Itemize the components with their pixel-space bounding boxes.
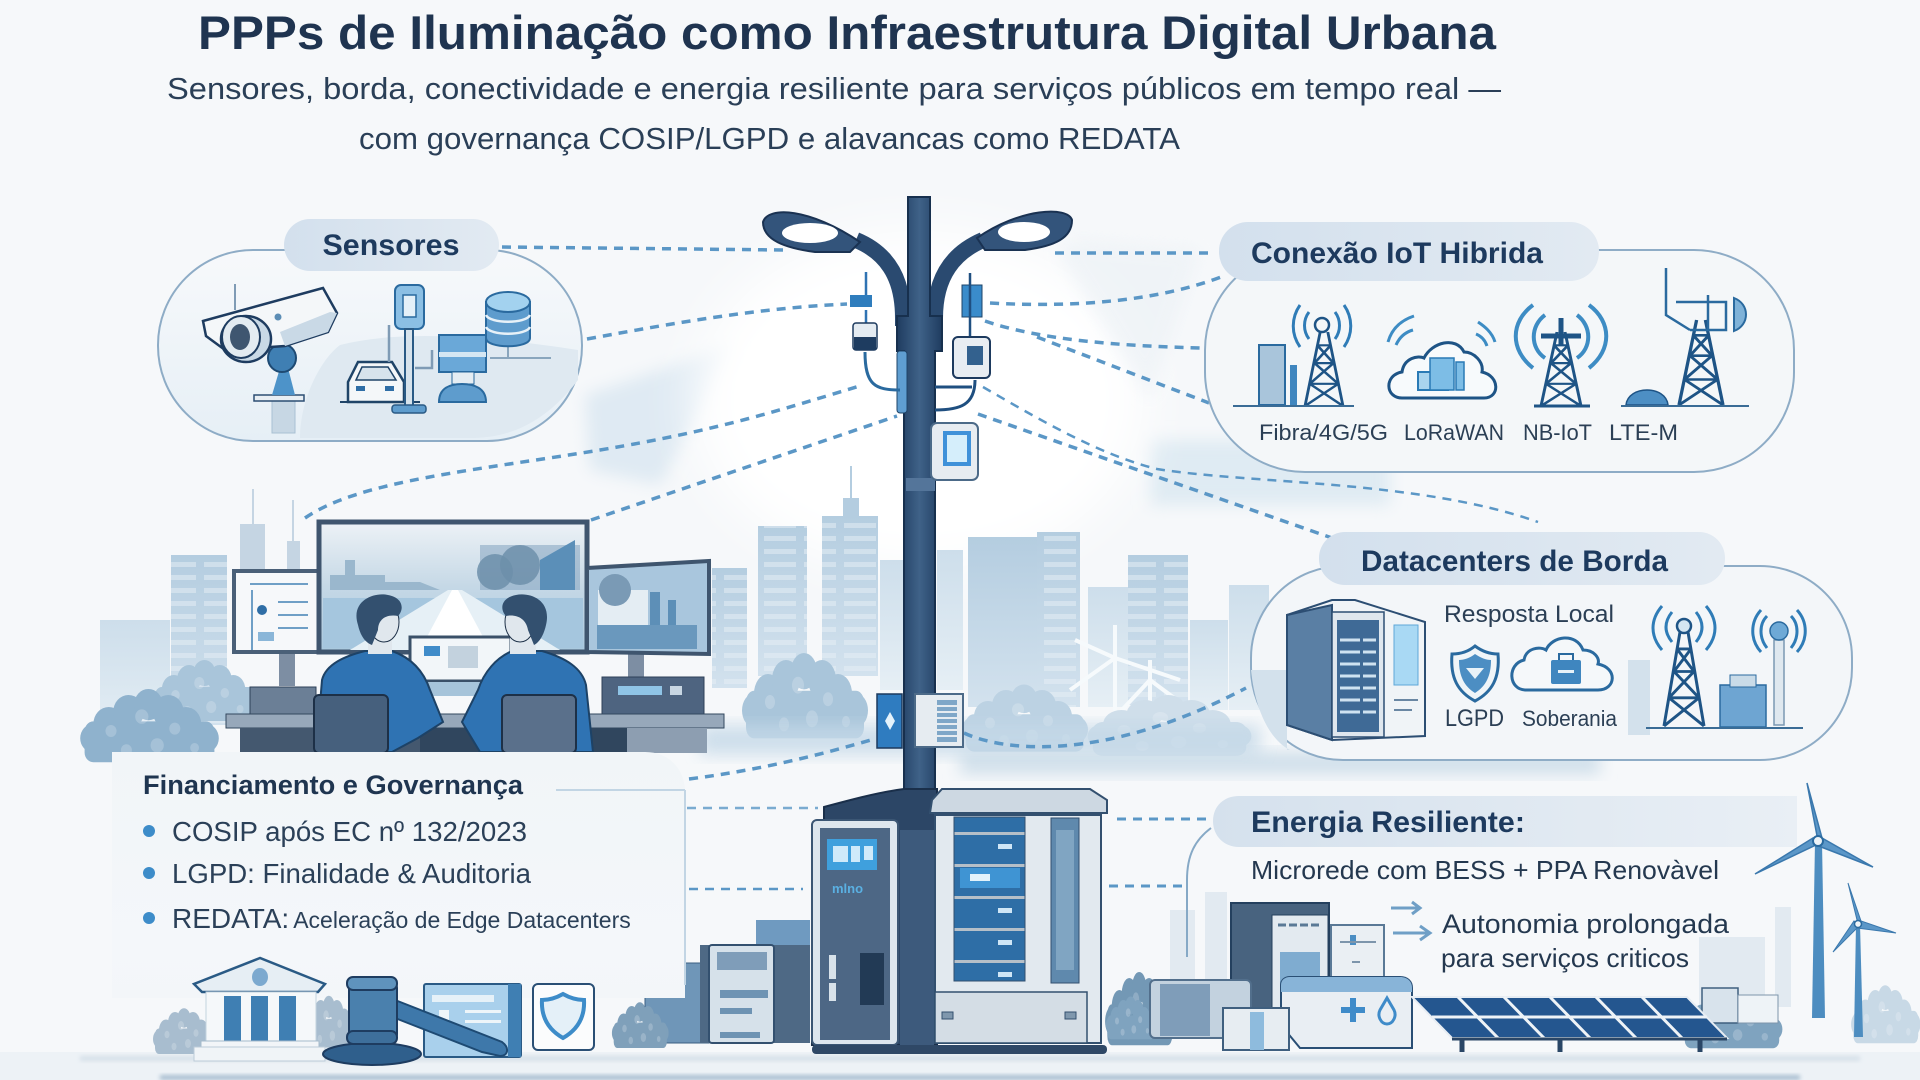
icon: soberania cloud	[1512, 638, 1612, 690]
blue pole box	[877, 694, 902, 748]
finance heading: Financiamento e Governança	[143, 770, 524, 800]
city skyline	[100, 466, 1269, 740]
left lamp head	[763, 212, 860, 252]
operator right	[462, 594, 593, 753]
icon: lorawan cloud	[1388, 316, 1496, 398]
street light pole	[763, 197, 1072, 800]
sensor left top	[850, 272, 900, 390]
white pole box	[915, 694, 963, 747]
finance panel edges	[556, 790, 685, 985]
arrows	[1391, 902, 1430, 940]
connectivity labels: LoRaWAN	[1404, 420, 1504, 445]
white wind turbines behind the pole	[1070, 625, 1185, 740]
panel: sensores	[158, 219, 582, 441]
panel: financiamento e governança	[112, 752, 685, 998]
side data panel	[1051, 818, 1079, 983]
icon: gavel	[323, 977, 507, 1065]
right monitor	[587, 561, 709, 680]
iot heading: Conexão IoT Hibrida	[1251, 237, 1543, 270]
resposta local label: Resposta Local	[1444, 601, 1614, 628]
icon: lgpd shield	[1452, 646, 1498, 701]
pole shaft	[897, 197, 942, 800]
panel: conexão iot híbrida	[1205, 222, 1794, 472]
sensor right top	[935, 273, 990, 410]
panel frame	[1205, 250, 1794, 472]
icon: battery	[1281, 977, 1412, 1048]
icon: borda tower	[1653, 606, 1715, 726]
icon: energy cabinet	[1331, 925, 1384, 978]
pole band	[906, 478, 935, 491]
curved connector	[1187, 828, 1211, 957]
icon: security camera	[203, 284, 337, 433]
ground	[0, 1052, 1920, 1080]
cabinet lower base	[935, 992, 1087, 1043]
autonomia text: Autonomia prolongada	[1442, 909, 1730, 939]
panel: datacenters de borda	[1251, 532, 1852, 760]
connectivity labels: Fibra/4G/5G	[1259, 420, 1388, 445]
panel inner landscape	[300, 336, 578, 438]
icon: borda mast and building	[1646, 610, 1805, 728]
lamp arms	[856, 240, 983, 318]
cabinet left door	[812, 820, 898, 1045]
sensores heading: Sensores	[322, 229, 460, 262]
right lamp head	[977, 212, 1072, 250]
icon: wind turbine large	[1755, 783, 1873, 1018]
panel faint background buildings	[1251, 660, 1650, 750]
datacenters pill	[1319, 532, 1725, 585]
connectivity labels: LTE-M	[1609, 420, 1678, 445]
icon: solar panels	[1412, 997, 1727, 1052]
small equipment left of cabinet	[645, 920, 810, 1043]
panel frame	[1251, 566, 1852, 760]
icon: small battery box	[1223, 1008, 1289, 1050]
sensores pill	[284, 219, 499, 271]
icon: government building	[194, 958, 325, 1061]
operator left	[314, 594, 443, 753]
cabinet dark base	[812, 789, 937, 1045]
panel frame	[158, 250, 582, 441]
desk	[226, 677, 724, 753]
lgpd label: LGPD	[1445, 705, 1504, 732]
device with screen	[931, 423, 978, 480]
icon: lte-m tower	[1621, 268, 1749, 406]
iot pill	[1219, 222, 1599, 281]
energia pill	[1213, 796, 1797, 847]
cabinet plinth	[812, 1045, 1107, 1054]
cabinet left door: mlno	[832, 881, 863, 896]
connectivity labels: NB-IoT	[1523, 420, 1592, 445]
icon: wind turbine small	[1833, 883, 1896, 1037]
criticos text: para serviços criticos	[1441, 943, 1689, 973]
microrede text: Microrede com BESS + PPA Renovàvel	[1251, 855, 1719, 885]
icon: edge server	[1287, 600, 1425, 740]
control room	[226, 522, 724, 753]
icon: pole sensor	[389, 285, 432, 413]
bullet cosip: COSIP após EC nº 132/2023	[172, 816, 527, 847]
bullet lgpd: LGPD: Finalidade & Auditoria	[172, 858, 531, 889]
bullet redata: REDATA:Aceleração de Edge Datacenters	[172, 903, 631, 934]
panel: energia resiliente	[1106, 783, 1920, 1052]
edge cabinet station	[812, 789, 1107, 1054]
left monitor	[234, 571, 320, 686]
icon: car	[340, 362, 420, 402]
cabinet right	[930, 789, 1107, 1043]
icon: shield card	[533, 984, 594, 1050]
cabinet pole section	[900, 830, 934, 1045]
icon: report document	[424, 984, 521, 1057]
bushes behind energy	[1106, 985, 1920, 1048]
main monitor	[319, 522, 587, 652]
icon: fibra tower	[1233, 305, 1354, 406]
faint background towers	[1170, 892, 1791, 1022]
blue pole strip	[897, 351, 907, 413]
title: PPPs de Iluminação como Infraestrutura Digital Urbana	[198, 6, 1497, 59]
icon: database	[486, 292, 551, 358]
bushes behind finance icons	[153, 996, 358, 1054]
atmospheric haze	[585, 230, 1600, 774]
datacenters heading: Datacenters de Borda	[1361, 545, 1668, 578]
energia heading: Energia Resiliente:	[1251, 806, 1525, 839]
server rack display	[954, 817, 1025, 981]
icon: box left	[1150, 980, 1251, 1038]
icon: nb-iot tower	[1516, 305, 1606, 406]
connectivity labels	[1259, 420, 1678, 445]
icon: energy server	[1231, 903, 1329, 1010]
subtitle line 2: com governança COSIP/LGPD e alavancas como REDATA	[359, 121, 1180, 156]
soberania label: Soberania	[1522, 706, 1618, 731]
subtitle line 1: Sensores, borda, conectividade e energia resiliente para serviços públicos em tempo real —	[167, 71, 1501, 106]
foreground bushes near cabinet	[612, 972, 1174, 1048]
connection dashed lines	[305, 247, 1538, 889]
finance panel background	[112, 752, 685, 998]
background trees	[80, 653, 1260, 762]
small desk monitor	[410, 637, 511, 696]
icon: sensor station	[439, 335, 486, 402]
icon: small buildings	[1702, 988, 1778, 1023]
